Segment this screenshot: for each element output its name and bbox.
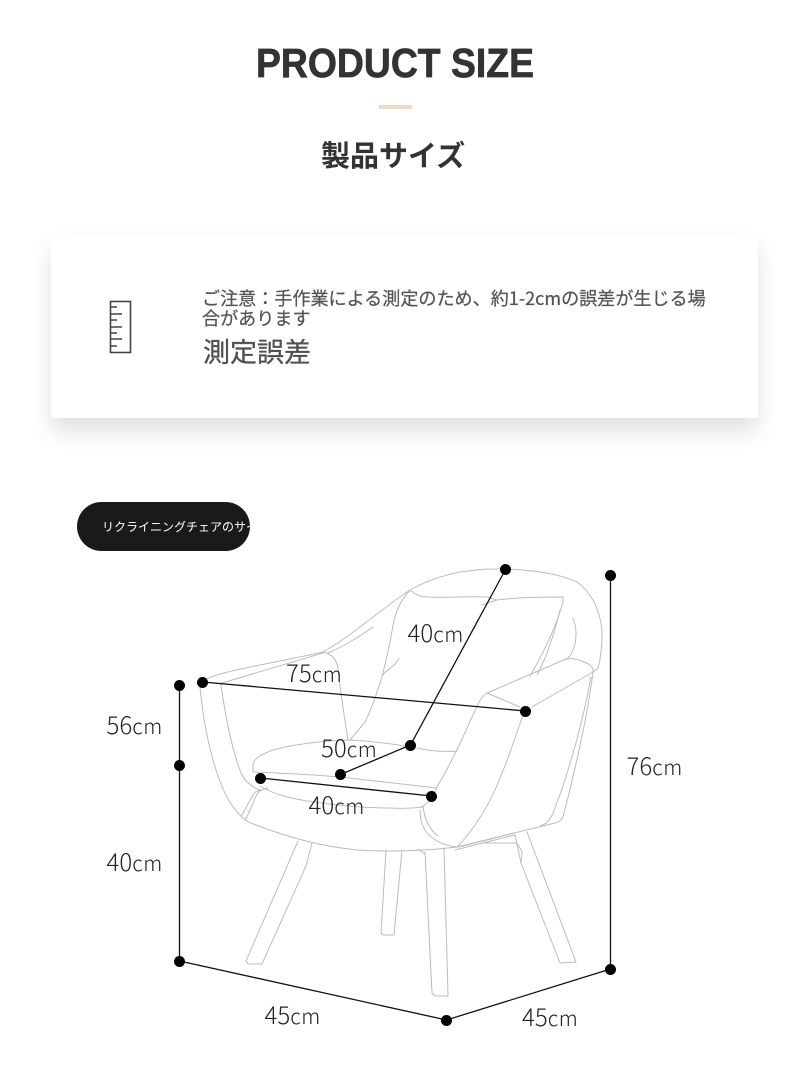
label: arm height: 56cm xyxy=(106,706,163,741)
chair back and left arm outline xyxy=(202,569,602,682)
label: overall width: 75cm xyxy=(286,654,342,689)
title divider xyxy=(379,105,412,109)
seat corner xyxy=(242,788,268,819)
label: seat width: 40cm xyxy=(308,786,365,821)
chair bottom xyxy=(243,817,563,851)
label: base width: 45cm xyxy=(264,996,321,1031)
panel: measurement note xyxy=(51,235,758,418)
legs xyxy=(246,841,312,964)
chair line drawing xyxy=(200,569,602,996)
label pill xyxy=(77,502,250,551)
label: seat height: 40cm xyxy=(106,843,163,878)
dimension points xyxy=(174,564,616,1026)
note text xyxy=(202,285,706,331)
label: base depth: 45cm xyxy=(522,998,578,1033)
note heading: 測定誤差 xyxy=(203,338,311,368)
label: total height: 76cm xyxy=(626,747,683,782)
right side outer xyxy=(563,672,593,817)
note text: ご注意：手作業による測定のため、約1-2cmの誤差が生じる場 xyxy=(202,285,706,311)
dimension lines xyxy=(180,570,610,1020)
inner back xyxy=(350,590,410,740)
subtitle: 製品サイズ xyxy=(321,133,465,175)
label: seat depth: 50cm xyxy=(321,729,377,764)
label: back height: 40cm xyxy=(408,614,464,649)
left arm xyxy=(200,687,243,818)
seat xyxy=(253,740,437,788)
icon: ruler xyxy=(110,300,132,354)
note text: 合があります xyxy=(202,305,310,331)
cushion xyxy=(410,590,497,605)
right arm xyxy=(487,659,593,707)
dimension labels xyxy=(106,614,683,1033)
